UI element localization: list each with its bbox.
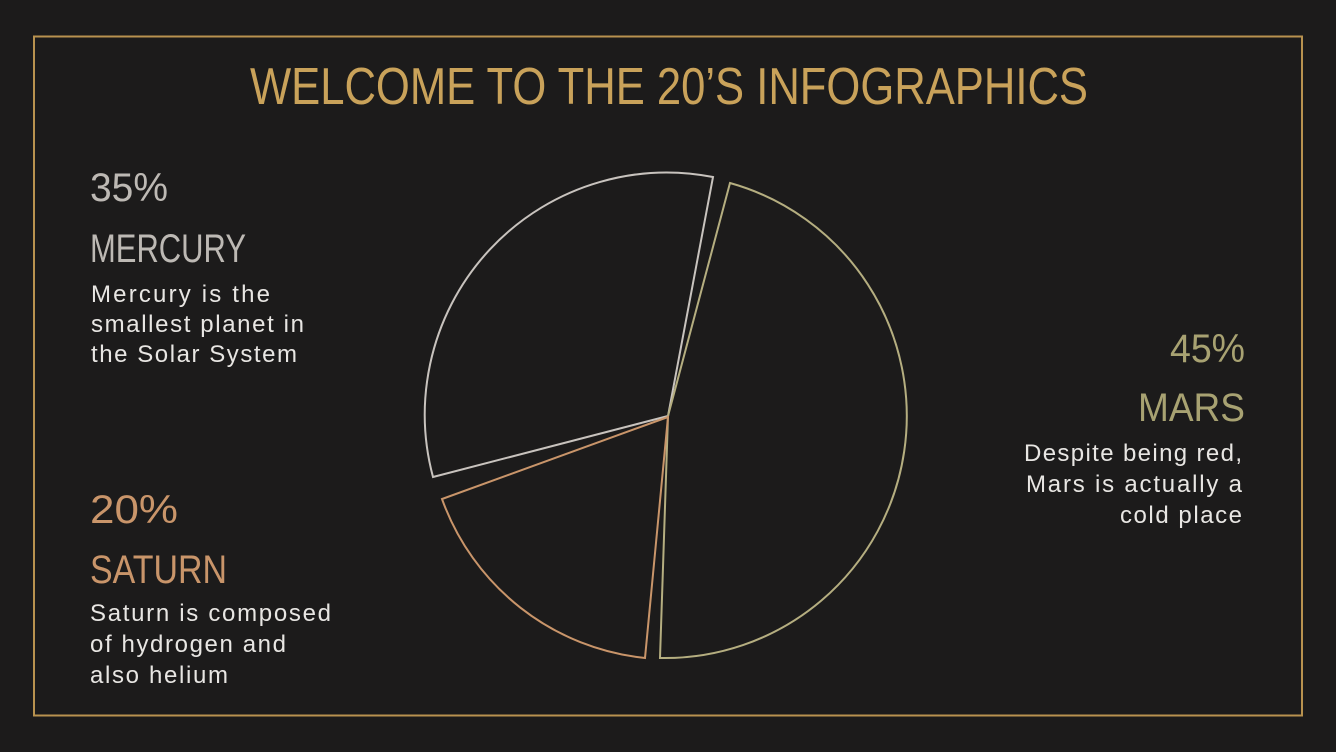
pie chart bbox=[425, 173, 907, 658]
text block: mercury: Mercury is the bbox=[91, 281, 270, 308]
text block: saturn bbox=[90, 488, 331, 689]
slice: saturn bbox=[442, 417, 668, 658]
text block: saturn: of hydrogen and bbox=[90, 631, 286, 658]
text block: saturn: SATURN bbox=[90, 548, 227, 592]
text block: mercury bbox=[90, 166, 304, 368]
text block: saturn: Saturn is composed bbox=[90, 600, 331, 627]
text block: saturn: also helium bbox=[90, 662, 228, 689]
text block: mercury: 35% bbox=[90, 166, 168, 210]
text block: saturn: 20% bbox=[90, 488, 178, 532]
title: WELCOME TO THE 20’S INFOGRAPHICS bbox=[250, 58, 1088, 116]
text block: mercury: MERCURY bbox=[90, 227, 246, 271]
text block: mars: 45% bbox=[1170, 327, 1245, 371]
text block: mercury: the Solar System bbox=[91, 341, 297, 368]
text block: mars bbox=[1024, 327, 1245, 529]
text block: mercury: smallest planet in bbox=[91, 311, 304, 338]
slice: mars bbox=[660, 183, 907, 658]
slice: mercury bbox=[425, 173, 713, 477]
text block: mars: cold place bbox=[1120, 502, 1242, 529]
text block: mars: Despite being red, bbox=[1024, 440, 1242, 467]
text block: mars: MARS bbox=[1138, 386, 1245, 430]
text block: mars: Mars is actually a bbox=[1026, 471, 1243, 498]
